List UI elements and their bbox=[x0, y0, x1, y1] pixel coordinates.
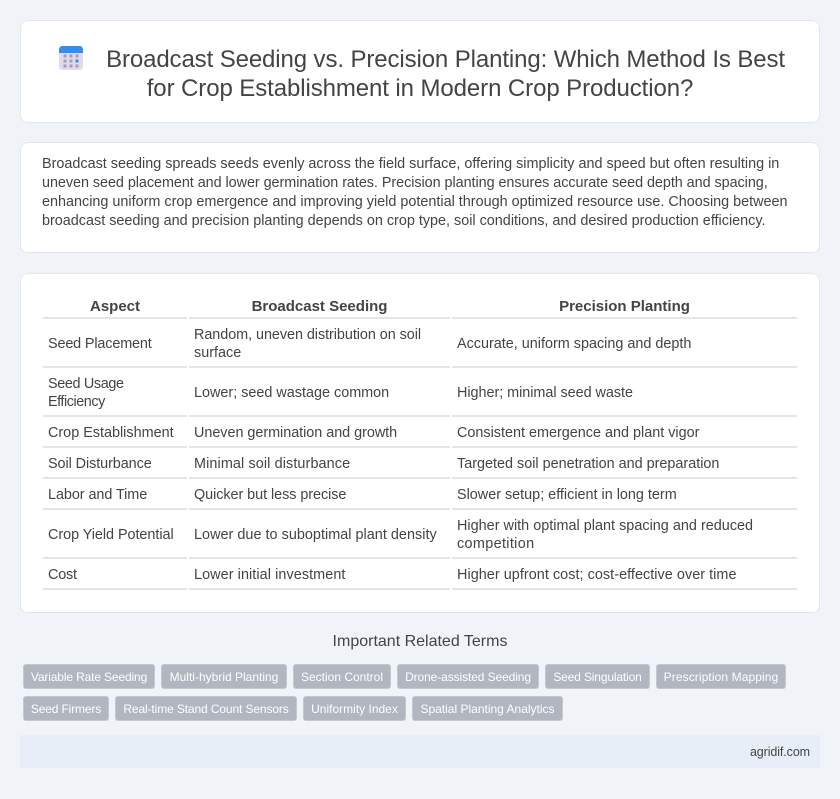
intro text: Broadcast seeding spreads seeds evenly across the field surface, offering simplicity and speed but often resulting in bbox=[42, 156, 779, 172]
row: Seed Usage Efficiency: Higher; minimal seed waste bbox=[457, 385, 633, 401]
tags: related terms: Uniformity Index bbox=[311, 702, 398, 716]
header row: Broadcast Seeding bbox=[252, 298, 387, 315]
intro text bbox=[42, 156, 788, 229]
row: Seed Placement bbox=[48, 327, 691, 361]
row: Seed Usage Efficiency: Seed Usage bbox=[48, 376, 124, 392]
row: Labor and Time bbox=[48, 487, 677, 503]
header row bbox=[90, 298, 690, 315]
row: Seed Placement: Random, uneven distribution on soil bbox=[194, 327, 421, 343]
row: Soil Disturbance: Targeted soil penetration and preparation bbox=[457, 456, 719, 472]
tags: related terms: Section Control bbox=[301, 670, 383, 684]
heading: related terms: Important Related Terms bbox=[333, 633, 507, 650]
row: Seed Placement: Accurate, uniform spacing and depth bbox=[457, 336, 691, 352]
row: Seed Usage Efficiency: Lower; seed wastage common bbox=[194, 385, 389, 401]
row: Labor and Time: Slower setup; efficient in long term bbox=[457, 487, 677, 503]
row: Crop Yield Potential: Higher with optimal plant spacing and reduced bbox=[457, 518, 753, 534]
row: Crop Establishment: Uneven germination and growth bbox=[194, 425, 397, 441]
tags: related terms: Real-time Stand Count Sensors bbox=[123, 702, 289, 716]
title panel bbox=[20, 20, 820, 123]
tags: related terms: Drone-assisted Seeding bbox=[405, 670, 531, 684]
intro text: broadcast seeding and precision planting depends on crop type, soil conditions, and desired production efficiency. bbox=[42, 213, 765, 229]
row: Cost bbox=[48, 567, 737, 583]
row: Labor and Time: Quicker but less precise bbox=[194, 487, 346, 503]
row: Soil Disturbance: Soil Disturbance bbox=[48, 456, 152, 472]
row: Seed Usage Efficiency bbox=[48, 376, 633, 410]
row: Crop Establishment: Consistent emergence and plant vigor bbox=[457, 425, 699, 441]
footer bar bbox=[20, 735, 820, 768]
row: Crop Establishment: Crop Establishment bbox=[48, 425, 174, 441]
panel: comparison table bbox=[20, 273, 820, 613]
footer text: agridif.com bbox=[750, 745, 810, 759]
tags: related terms: Multi-hybrid Planting bbox=[170, 670, 278, 684]
tags: related terms bbox=[23, 664, 786, 721]
row: Crop Yield Potential: competition bbox=[457, 536, 534, 552]
intro text: uneven seed placement and lower germination rates. Precision planting ensures accurate seed depth and spacing, bbox=[42, 175, 768, 191]
row: Cost: Higher upfront cost; cost-effective over time bbox=[457, 567, 737, 583]
header row: Aspect bbox=[90, 298, 140, 315]
row: Cost: Cost bbox=[48, 567, 77, 583]
row: Crop Yield Potential bbox=[48, 518, 753, 552]
row: Seed Placement: Seed Placement bbox=[48, 336, 152, 352]
title bbox=[106, 46, 785, 102]
row: Crop Yield Potential: Lower due to suboptimal plant density bbox=[194, 527, 437, 543]
row: Soil Disturbance bbox=[48, 456, 719, 472]
panel: introduction bbox=[20, 142, 820, 253]
tags: related terms: Seed Singulation bbox=[553, 670, 642, 684]
row: Crop Yield Potential: Crop Yield Potential bbox=[48, 527, 174, 543]
tags: related terms: Variable Rate Seeding bbox=[31, 670, 147, 684]
row: Seed Usage Efficiency: Efficiency bbox=[48, 394, 105, 410]
row: Soil Disturbance: Minimal soil disturbance bbox=[194, 456, 350, 472]
icon: calendar bbox=[59, 46, 83, 70]
row: Crop Establishment bbox=[48, 425, 700, 441]
row: Cost: Lower initial investment bbox=[194, 567, 346, 583]
row: Labor and Time: Labor and Time bbox=[48, 487, 147, 503]
title: for Crop Establishment in Modern Crop Production? bbox=[147, 75, 693, 102]
tags: related terms: Prescription Mapping bbox=[664, 670, 778, 684]
intro text: enhancing uniform crop emergence and improving yield potential through optimized resource use. Choosing between bbox=[42, 194, 788, 210]
header row: Precision Planting bbox=[559, 298, 690, 315]
row: Seed Placement: surface bbox=[194, 345, 241, 361]
tags: related terms: Spatial Planting Analytics bbox=[420, 702, 555, 716]
comparison table bbox=[43, 298, 797, 590]
tags: related terms: Seed Firmers bbox=[31, 702, 101, 716]
title: Broadcast Seeding vs. Precision Planting: Which Method Is Best bbox=[106, 46, 785, 73]
